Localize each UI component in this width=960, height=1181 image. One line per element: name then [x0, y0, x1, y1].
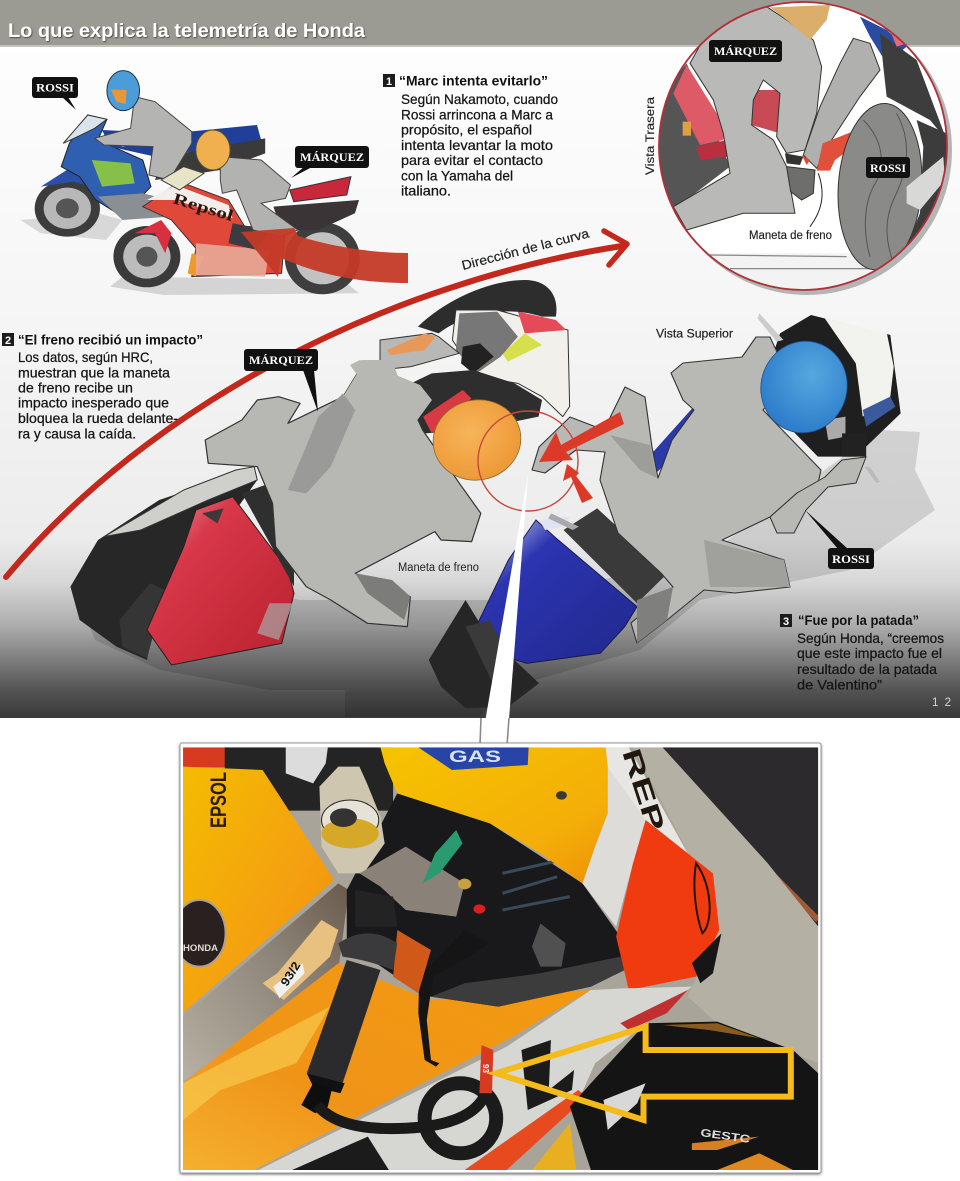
Rossi front: fairing, controls	[649, 313, 901, 483]
shadow of motorcycles on the ground	[75, 430, 935, 717]
text block 2: El freno recibió un impacto: 2	[5, 335, 11, 347]
top view: Márquez motorcycle	[70, 280, 570, 665]
text block 3: Fue por la patada: de Valentino”	[797, 676, 882, 692]
text block 2: El freno recibió un impacto: “El freno recibió un impacto”	[18, 332, 203, 348]
tag: Rossi, inset	[866, 157, 910, 178]
photo lettering	[183, 745, 751, 1146]
text block 1: Marc intenta evitarlo	[383, 72, 558, 198]
header band	[0, 0, 960, 47]
text block 1: Marc intenta evitarlo: italiano.	[401, 182, 451, 198]
white pointer to photo	[480, 475, 528, 745]
text block 2: El freno recibió un impacto: impacto inesperado que	[18, 394, 169, 410]
page number: 1 2	[932, 697, 951, 709]
text block 2: El freno recibió un impacto: ra y causa la caída.	[18, 426, 136, 442]
label: vista superior: Vista Superior	[656, 328, 733, 340]
tag: Márquez, top view	[244, 349, 318, 412]
Rossi rider	[95, 97, 192, 180]
text block 1: Marc intenta evitarlo: 1	[386, 76, 392, 88]
tag: Rossi, top view	[805, 510, 874, 569]
red impact arrow, side view	[241, 228, 408, 283]
Rossi rider shading	[610, 435, 790, 643]
red circle around the brake lever	[478, 411, 578, 511]
tag: Rossi, side view: ROSSI	[36, 80, 74, 94]
text block 1: Marc intenta evitarlo: intenta levantar la moto	[401, 137, 553, 153]
Márquez rear: tyre, tail and seat	[70, 467, 294, 665]
photo lettering: HONDA	[183, 943, 218, 954]
Márquez helmet, top view	[426, 392, 528, 488]
tag: Márquez, inset	[709, 40, 782, 62]
inset circle: rear view	[645, 0, 957, 295]
photo lettering: 93/2	[278, 959, 304, 989]
Márquez helmet	[196, 130, 230, 170]
text block 3: Fue por la patada: “Fue por la patada”	[798, 612, 919, 628]
Rossi rear: tyre, tail and seat	[429, 508, 668, 708]
text block 1: Marc intenta evitarlo: con la Yamaha del	[401, 168, 513, 184]
text block 1: Marc intenta evitarlo: propósito, el español	[401, 122, 532, 138]
text block 2: El freno recibió un impacto: bloquea la rueda delante-	[18, 410, 178, 426]
Rossi motorcycle	[20, 71, 265, 240]
Márquez rider	[220, 157, 298, 237]
photo: Honda handlebar and brake lever guard	[173, 745, 818, 1170]
top view: Rossi motorcycle	[429, 313, 901, 708]
tag: Rossi, top view: ROSSI	[832, 552, 870, 566]
tag: Rossi, side view	[32, 77, 78, 110]
maneta de freno label, inset: Maneta de freno	[749, 230, 832, 242]
kick arrow	[539, 412, 624, 462]
photo lettering: GAS	[449, 747, 501, 766]
tag: Márquez, inset: MÁRQUEZ	[714, 44, 777, 58]
text block 3: Fue por la patada: que este impacto fue el	[797, 645, 942, 661]
label: dirección de la curva: Dirección de la curva	[460, 225, 591, 273]
side view: Rossi and Márquez motorcycles	[20, 71, 360, 295]
text block 1: Marc intenta evitarlo: Según Nakamoto, cuando	[401, 91, 558, 107]
text block 3: Fue por la patada: Según Honda, “creemos	[797, 630, 944, 646]
text block 3: Fue por la patada: 3	[783, 616, 789, 628]
Márquez front: tyre and fairing	[380, 280, 570, 433]
vista trasera label: Vista Trasera	[645, 96, 657, 175]
text block 1: Marc intenta evitarlo: Rossi arrincona a Marc a	[401, 106, 553, 122]
text block 2: El freno recibió un impacto: muestran que la maneta	[18, 364, 170, 380]
text block 3: Fue por la patada	[780, 612, 944, 692]
photo lettering: REP	[616, 745, 671, 835]
Márquez rider upper arm	[350, 360, 432, 430]
photo lettering: EPSOL	[206, 772, 231, 828]
photo lettering: 93	[481, 1064, 490, 1073]
text block 1: Marc intenta evitarlo: “Marc intenta evitarlo”	[399, 72, 548, 88]
text block 2: El freno recibió un impacto	[2, 332, 203, 442]
text block 3: Fue por la patada: resultado de la patada	[797, 661, 937, 677]
tag: Márquez, top view: MÁRQUEZ	[249, 353, 313, 367]
Repsol lettering, side view: Repsol	[171, 191, 236, 225]
curved red direction arrow	[6, 231, 627, 577]
Rossi helmet, top view	[751, 331, 857, 443]
tag: Márquez, side view: MÁRQUEZ	[300, 150, 364, 164]
text block 2: El freno recibió un impacto: de freno recibe un	[18, 380, 133, 396]
Rossi helmet	[107, 71, 140, 111]
Márquez rider body	[205, 360, 481, 627]
label: maneta de freno: Maneta de freno	[398, 562, 479, 574]
Rossi right arm and knee	[770, 457, 866, 533]
text block 1: Marc intenta evitarlo: para evitar el contacto	[401, 152, 543, 168]
tag: Márquez, side view	[291, 146, 369, 178]
illustration background	[0, 0, 960, 718]
photo lettering: GESTC	[700, 1127, 751, 1146]
text block 2: El freno recibió un impacto: Los datos, según HRC,	[18, 349, 153, 365]
Rossi rider body	[532, 337, 821, 643]
tag: Rossi, inset: ROSSI	[870, 161, 906, 175]
Márquez motorcycle	[110, 130, 360, 295]
upward brake arrow	[563, 464, 593, 503]
title: Lo que explica la telemetría de Honda	[8, 20, 365, 42]
photo frame	[180, 743, 821, 1173]
